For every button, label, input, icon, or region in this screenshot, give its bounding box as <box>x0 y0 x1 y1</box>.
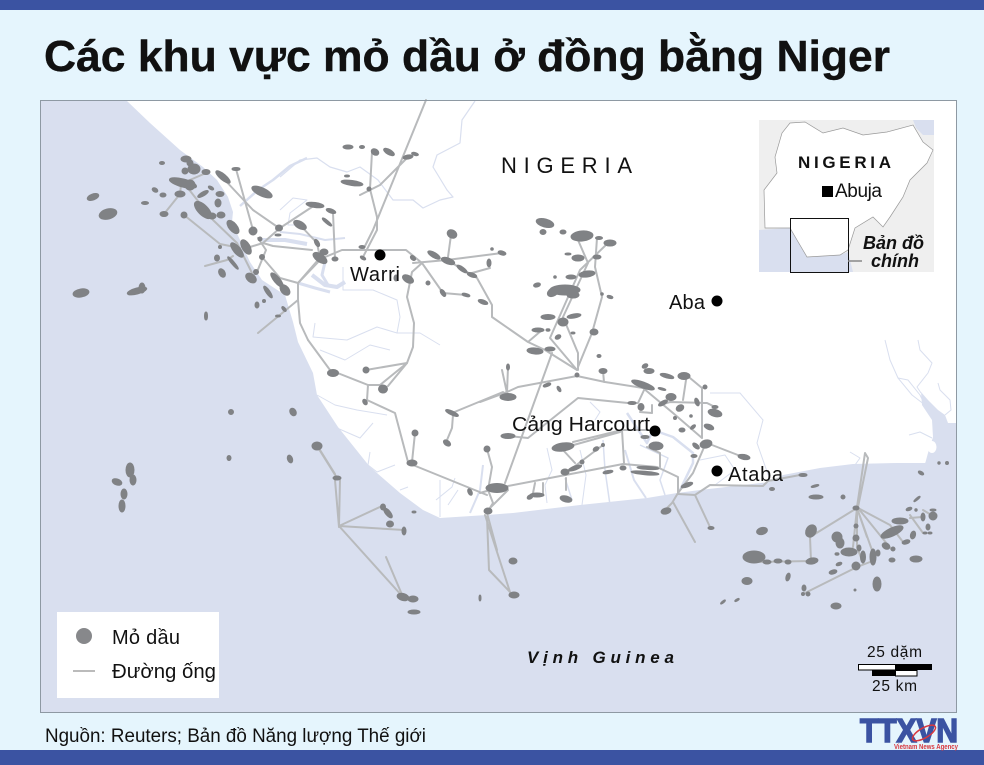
label: Vịnh Guinea: Vịnh Guinea <box>527 648 674 667</box>
sea background <box>41 101 956 712</box>
top bar <box>0 0 984 10</box>
legend <box>57 612 219 698</box>
scale bar: 25 km <box>872 678 917 695</box>
map border <box>40 100 956 712</box>
logo: TTXVN: TTXVN <box>860 712 958 749</box>
scale bar <box>858 644 932 695</box>
pipelines <box>164 100 933 597</box>
rivers and creeks <box>240 101 951 517</box>
source note: Nguồn: Reuters; Bản đồ Năng lượng Thế giới <box>45 726 426 747</box>
legend: Mỏ dầu <box>112 627 180 649</box>
logo: TTXVN: Vietnam News Agency <box>894 742 959 751</box>
inset locator map: NIGERIA <box>798 153 891 172</box>
city: Aba <box>669 292 722 314</box>
city: Warri: Warri <box>350 264 400 286</box>
city: Warri <box>350 250 400 286</box>
oil fields <box>72 145 949 614</box>
legend: Đường ống <box>112 661 216 683</box>
city: Ataba: Ataba <box>728 464 784 486</box>
city: Cảng Harcourt: Cảng Harcourt <box>512 414 650 436</box>
estuary <box>921 392 957 472</box>
estuary island <box>928 441 936 453</box>
panel: map <box>40 100 957 712</box>
inset locator map <box>759 120 934 272</box>
inset locator map: Bản đồ <box>863 233 924 253</box>
label: NIGERIA: NIGERIA <box>501 153 632 178</box>
title: Các khu vực mỏ dầu ở đồng bằng Niger <box>44 31 890 81</box>
inset locator map: chính <box>871 251 919 271</box>
scale bar: 25 dặm <box>867 644 922 661</box>
bottom bar <box>0 750 984 765</box>
city: Aba: Aba <box>669 292 706 314</box>
land: Niger delta <box>127 101 956 518</box>
inset locator map: Abuja <box>835 181 882 202</box>
